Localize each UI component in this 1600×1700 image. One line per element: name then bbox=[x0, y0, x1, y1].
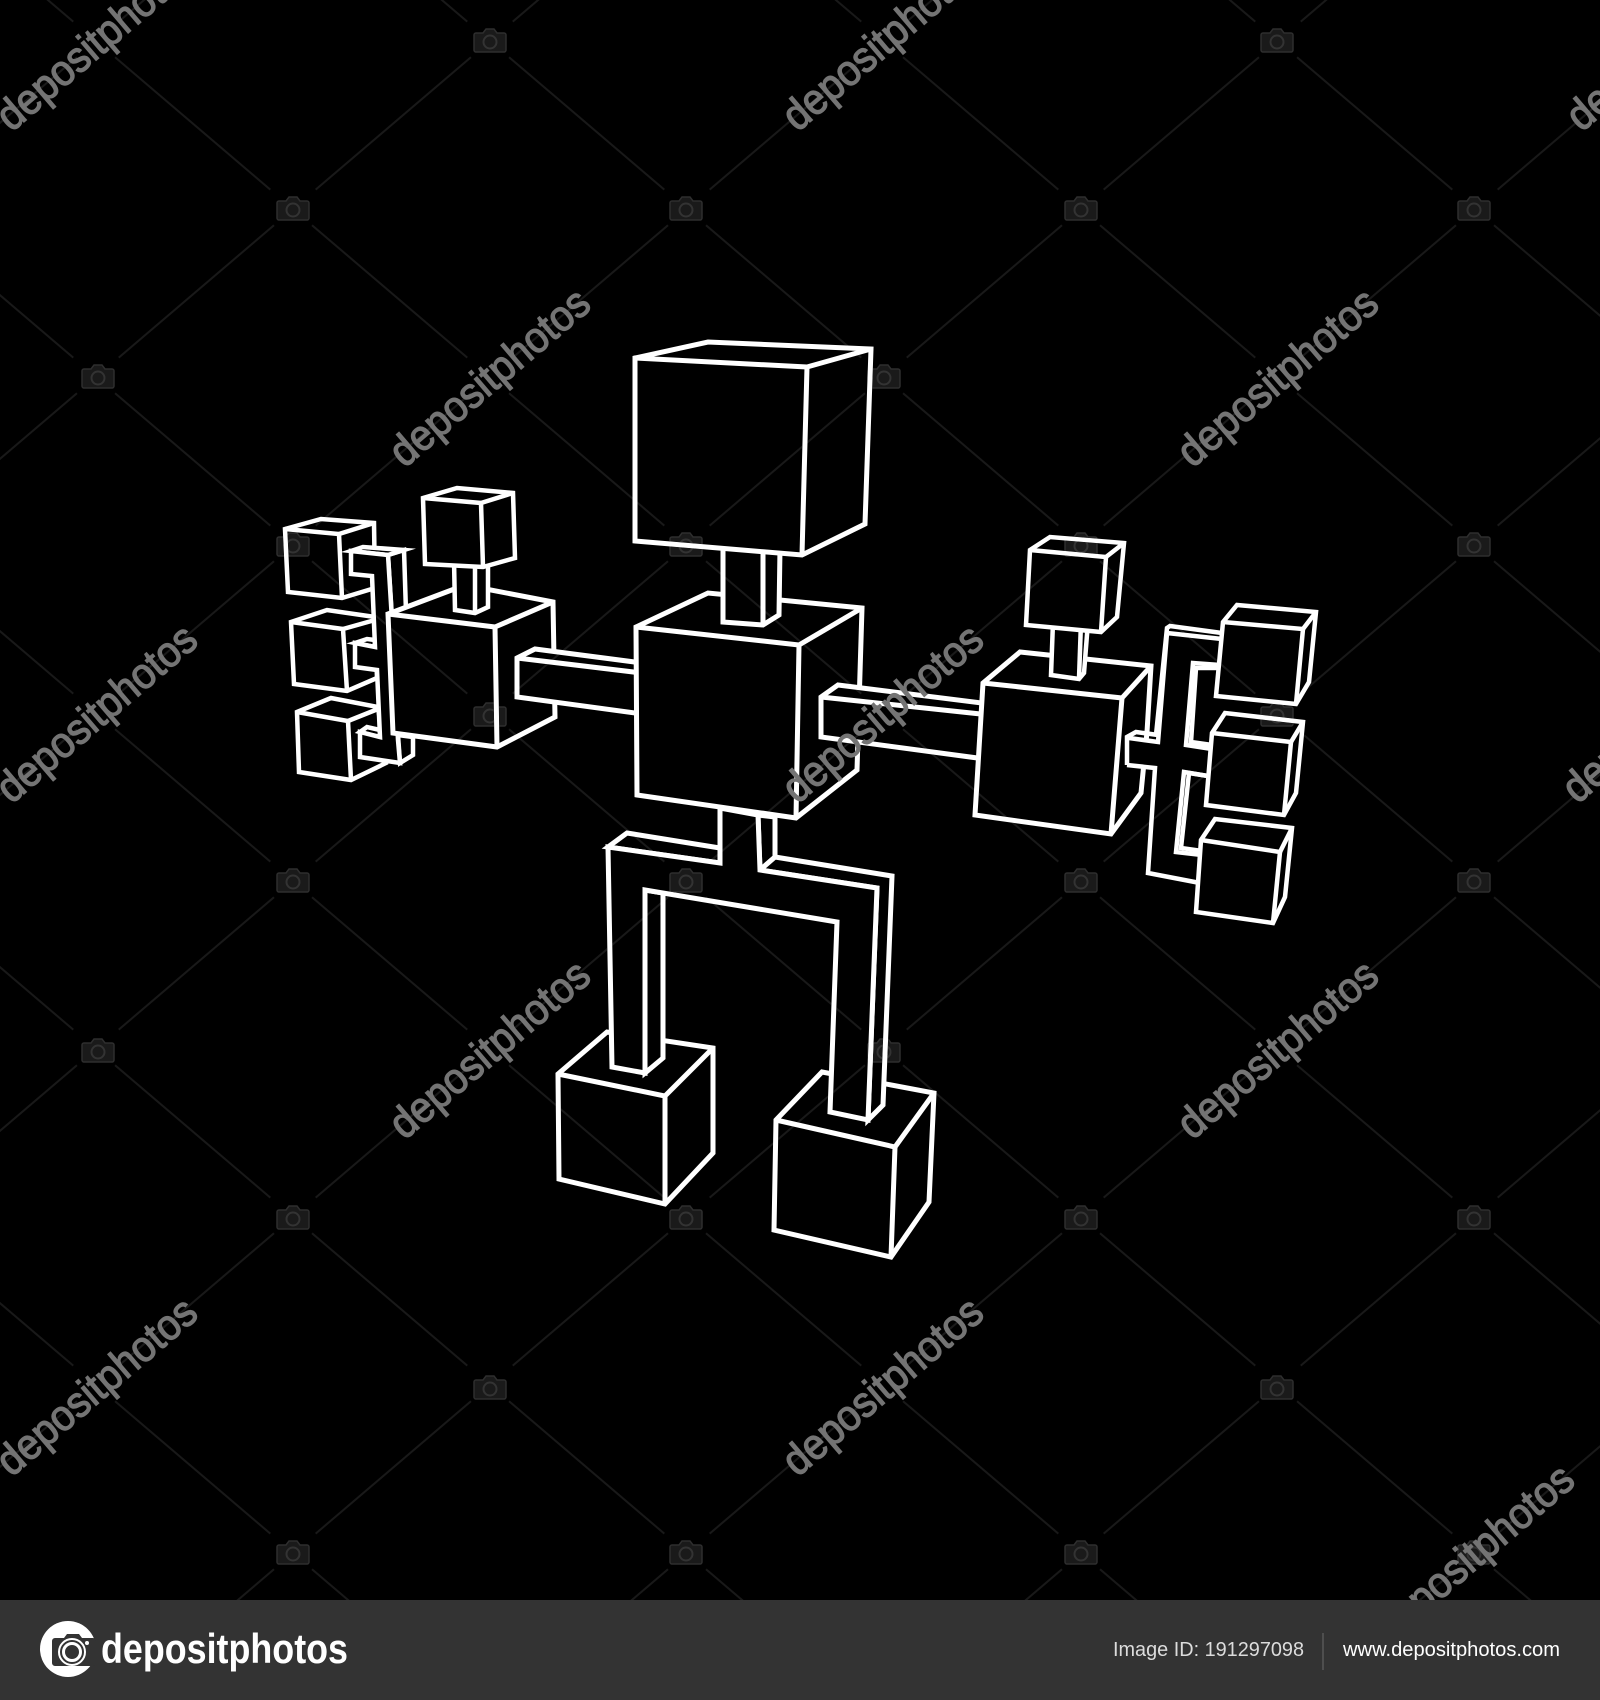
watermark text repeated diagonally: depositphotos bbox=[1168, 951, 1388, 1148]
separator bbox=[1322, 1633, 1324, 1670]
right hand: three small cubes bbox=[1196, 605, 1316, 923]
small cube left 2 bbox=[291, 610, 377, 691]
watermark text repeated diagonally: depositphotos bbox=[380, 279, 600, 476]
small cube right 2 bbox=[1206, 713, 1303, 815]
small cube right 3 bbox=[1196, 819, 1292, 923]
right forearm cube bbox=[975, 652, 1151, 834]
head cube bbox=[635, 342, 871, 555]
website url: www.depositphotos.com bbox=[1342, 1639, 1560, 1661]
left forearm cube bbox=[388, 585, 555, 747]
icon: depositphotos camera logo bbox=[40, 1621, 96, 1677]
image id: Image ID: 191297098 bbox=[1113, 1639, 1304, 1661]
wireframe robot made of cubes bbox=[285, 342, 1316, 1257]
watermark text repeated diagonally: depositphotos bbox=[773, 615, 993, 812]
legs and hips connector bbox=[608, 808, 892, 1120]
watermark text repeated diagonally: depositphotos bbox=[1168, 279, 1388, 476]
right small upper cube and neck bbox=[1026, 537, 1124, 679]
body cube bbox=[636, 593, 862, 818]
small cube right 1 bbox=[1216, 605, 1316, 704]
neck bbox=[723, 548, 780, 625]
right arm bar bbox=[821, 685, 990, 759]
right foot cube bbox=[774, 1072, 934, 1257]
left hand: three small cubes bbox=[285, 519, 413, 780]
watermark text repeated diagonally: depositphotos bbox=[380, 951, 600, 1148]
left arm bar bbox=[517, 649, 650, 715]
left hand connector bbox=[351, 547, 413, 763]
watermark text repeated diagonally: depositphotos bbox=[1364, 1455, 1584, 1652]
left foot cube bbox=[558, 1032, 713, 1204]
small cube left 1 bbox=[285, 519, 375, 598]
right hand connector bbox=[1127, 626, 1222, 883]
left small upper cube and neck bbox=[423, 488, 515, 613]
small cube left 3 bbox=[297, 698, 386, 780]
logo wordmark: depositphotos bbox=[101, 1625, 348, 1672]
footer bar bbox=[0, 1600, 1600, 1700]
watermark text repeated diagonally: depositphotos bbox=[773, 1288, 993, 1485]
